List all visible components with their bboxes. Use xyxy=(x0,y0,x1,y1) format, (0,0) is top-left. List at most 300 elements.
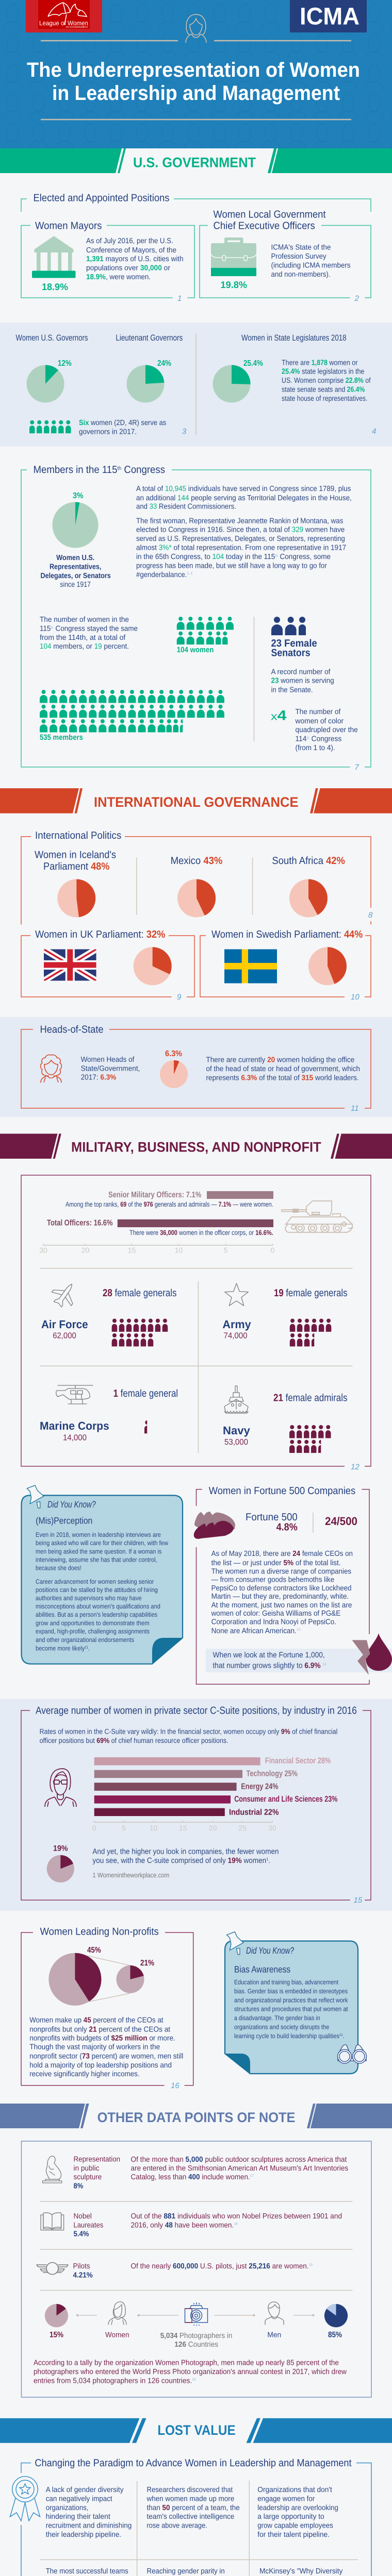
text: 104 members: 115 xyxy=(40,624,52,633)
text: congress history: and 33 Resident Commissioners. xyxy=(136,503,236,511)
text: six governors: Six women (2D, 4R) serve as xyxy=(79,419,166,427)
caption: pie: Representatives, xyxy=(50,563,101,571)
chart: Mexico 43%: Mexico 43% xyxy=(171,855,223,867)
row: public sculpture: sculpture xyxy=(73,2173,102,2181)
heading: heads of state: Heads-of-State xyxy=(40,1024,104,1036)
text: misperception body: Career advancement for women seeking senior xyxy=(36,1578,154,1585)
banner: International Governance: INTERNATIONAL GOVERNANCE xyxy=(94,794,298,810)
callout: did you know bias awareness xyxy=(225,1932,366,2074)
text: mayors: 1,391 mayors of U.S. cities with xyxy=(86,255,184,263)
text: congress history: 5, 6 xyxy=(187,572,192,575)
chart: state legislatures pie xyxy=(213,333,347,403)
chart: Iceland 48%: Parliament 48% xyxy=(43,861,110,872)
heading: 115th Congress: Congress xyxy=(121,464,165,476)
text: bias awareness body xyxy=(234,1979,348,2040)
icon: woman outline xyxy=(186,14,206,43)
text: collective intelligence: rose above average. xyxy=(146,2522,207,2530)
chart: industry bar chart: Industrial 22% xyxy=(229,1808,279,1817)
row: public sculpture: Of the more than 5,000 public outdoor sculptures across America that xyxy=(131,2156,347,2164)
logo: League of Women in Government xyxy=(26,0,102,32)
cell: Air Force: Air Force xyxy=(41,1318,88,1331)
title: The Underrepresentation of Women xyxy=(27,59,360,81)
cell: Navy: Navy xyxy=(223,1424,251,1437)
text: bias awareness body: learning cycle to build leadership qualities xyxy=(234,2032,353,2040)
chart: industry bar chart: 30 xyxy=(268,1824,276,1832)
text: non-profit CEOs: hold a majority of top leadership positions and xyxy=(29,2061,172,2070)
chart: Mexico 43% xyxy=(171,855,223,917)
chart: women governors pie: Women U.S. Governors xyxy=(15,333,88,343)
text: mayors: As of July 2016, per the U.S. xyxy=(86,237,173,245)
text: heads of government: Women Heads of xyxy=(81,1056,135,1064)
text: lack of gender diversity: A lack of gender diversity xyxy=(46,2486,124,2494)
panel: members in the 115th Congress xyxy=(21,464,371,772)
text: bias awareness body: and organizational practices that reflect work xyxy=(234,1997,348,2004)
stat: Fortune 500 share xyxy=(246,1512,357,1533)
text: women of color: quadrupled over the xyxy=(295,726,358,734)
banner: Lost Value xyxy=(0,2418,392,2443)
text: misperception body: misconceptions about women's qualifications and xyxy=(36,1603,160,1610)
chart: industry bar chart: 15 xyxy=(179,1824,187,1832)
logo: ICMA xyxy=(290,0,367,32)
cell: Navy xyxy=(223,1386,348,1453)
caption: pie: Women U.S. xyxy=(56,554,94,562)
text: congress history: Congress, some xyxy=(278,553,331,561)
heading: local government CEOs: Women Local Government xyxy=(214,209,326,221)
text: bias awareness body: a disadvantage. The gender bias in xyxy=(234,2014,320,2022)
text: women of color: women of color xyxy=(295,717,344,725)
text: misperception body: being asked who will care for their children, with few xyxy=(36,1539,169,1547)
icon: broken drop xyxy=(352,1633,392,1675)
text: record senators: in the Senate. xyxy=(271,686,313,694)
chart: state legislatures pie: 25.4% xyxy=(243,359,263,368)
chart: industry bar chart: 5 xyxy=(122,1824,126,1832)
icon: camera xyxy=(185,2302,207,2326)
text: mayors xyxy=(86,237,184,281)
heading: international politics: International Politics xyxy=(35,830,121,841)
text: organizations overlooking women xyxy=(257,2486,338,2539)
text: women of color: The number of xyxy=(295,708,341,716)
cell: Marine Corps: 1 female general xyxy=(113,1388,178,1399)
chart: women in Congress pie xyxy=(53,492,98,548)
row: pilots: Pilots xyxy=(73,2262,90,2270)
heading: did you know: Did You Know? xyxy=(246,1945,294,1956)
panel: governors and state legislatures: 4 xyxy=(372,427,376,436)
panel: other data points xyxy=(22,2141,371,2397)
logo: ICMA: ICMA xyxy=(300,3,360,30)
text: Fortune 500 CEOs: the list — or just under 5% of the total list. xyxy=(211,1559,341,1567)
chart: officers bar chart: 30 xyxy=(39,1246,47,1255)
icon: Swedish flag xyxy=(224,949,277,983)
text: bias awareness body: bias. Gender bias is embedded in stereotypes xyxy=(234,1988,348,1995)
chart: officers bar chart: 20 xyxy=(81,1246,89,1255)
text: misperception body: positions can be stalled by the attitudes of hiring xyxy=(36,1586,158,1594)
chart: women governors pie: 12% xyxy=(58,359,72,368)
text: organizations overlooking women: leadership are overlooking xyxy=(257,2504,338,2512)
banner: U.S. Government xyxy=(0,148,392,173)
panel: heads of state: 11 xyxy=(351,1104,359,1113)
caption: pie: Delegates, or Senators xyxy=(40,572,111,580)
text: gender parity GDP: Reaching gender parity in xyxy=(146,2567,225,2575)
heading: Swedish parliament: Women in Swedish Parliament: 44% xyxy=(211,929,363,940)
text: McKinsey report: McKinsey's "Why Diversity xyxy=(259,2567,343,2575)
panel: heads of state xyxy=(0,1017,392,1117)
row: public sculpture xyxy=(42,2156,348,2191)
chart: Sweden 44% xyxy=(308,947,347,985)
text: ICMA survey: and non-members). xyxy=(271,270,330,279)
text: lack of gender diversity: can negatively impact xyxy=(46,2495,112,2503)
chart: photographers gender split xyxy=(45,2302,348,2349)
panel: C-suite positions by industry xyxy=(0,1699,392,1911)
chart: officers bar chart xyxy=(39,1191,275,1255)
text: women of color: th xyxy=(306,736,309,740)
chart: photographers gender split: 5,034 Photographers in xyxy=(160,2332,232,2340)
text: congress history: almost 3%* of total representation. From one representative in 1917 xyxy=(136,544,346,552)
text: congress history: in the 65th Congress, to 104 today in the 115 xyxy=(136,553,279,561)
pictogram: 21 female admirals xyxy=(289,1425,331,1453)
text: heads of government: 2017: 6.3% xyxy=(81,1074,116,1082)
panel: C-suite positions by industry: 15 xyxy=(354,1896,363,1905)
panel: military xyxy=(21,1175,371,1471)
row: pilots: 19 xyxy=(309,2263,313,2267)
text: 104 members: The number of women in the xyxy=(40,616,129,624)
text: bias awareness body: Education and training bias, advancement xyxy=(234,1979,339,1986)
stat: Fortune 500 share: 4.8% xyxy=(276,1522,298,1533)
stat: Fortune 500 share: 24/500 xyxy=(325,1515,357,1528)
icon: curly-haired woman xyxy=(41,1055,61,1083)
text: world leaders: of the head of state or head of government, which xyxy=(206,1065,360,1073)
icon: UK flag xyxy=(44,949,96,981)
text: world press photo: entries from 5,034 photographers in 126 countries. xyxy=(34,2377,201,2385)
text: lack of gender diversity: recruitment and diminishing xyxy=(46,2522,132,2530)
title: in Leadership and Management xyxy=(52,82,340,105)
text: heads of government: State/Government, xyxy=(81,1064,140,1073)
cell: Air Force: 28 female generals xyxy=(103,1287,176,1299)
text: mayors: populations over 30,000 or xyxy=(86,264,170,273)
chart: women governors pie xyxy=(15,333,88,403)
text: women of color: (from 1 to 4). xyxy=(295,744,335,752)
logo: League of Women in Government: League of Women xyxy=(39,20,88,27)
icon: six women xyxy=(29,420,71,433)
logo: League of Women in Government: IN GOVERNMENT xyxy=(66,26,88,28)
row: Nobel laureates: Laureates xyxy=(73,2222,103,2230)
chart: industry bar chart: Energy 24% xyxy=(241,1782,279,1791)
banner: Military, Business, and Nonprofit xyxy=(0,1133,392,1159)
heading: bias awareness: Bias Awareness xyxy=(234,1964,290,1975)
text: misperception body: men being asked the same question. If a woman is xyxy=(36,1548,161,1555)
text: collective intelligence: team's collective intelligence xyxy=(146,2513,234,2521)
text: six governors: governors in 2017. xyxy=(79,428,137,436)
icon: binoculars xyxy=(337,2045,366,2063)
stat: 19.8%: 19.8% xyxy=(221,279,247,290)
text: ICMA survey: Profession Survey xyxy=(271,252,326,261)
panel: elected and appointed positions: Elected and Appointed Positions xyxy=(33,193,169,204)
chart: industry bar chart: 25 xyxy=(238,1824,247,1832)
text: congress history: an additional 144 people serving as Territorial Delegates in the House, xyxy=(136,494,352,502)
text: collective intelligence: when women made up more xyxy=(146,2495,234,2503)
chart: South Africa 42% xyxy=(272,855,345,917)
text: 104 members: th xyxy=(51,625,54,630)
row: Nobel laureates xyxy=(41,2212,342,2239)
chart: officers bar chart: Total Officers: 16.6% xyxy=(47,1219,112,1228)
chart: women in Congress pie: 3% xyxy=(73,492,83,500)
text: misperception body xyxy=(36,1531,169,1652)
icon: government building xyxy=(32,236,75,278)
text: state legislators: US. Women comprise 22.8% of xyxy=(282,377,371,385)
heading: misperception: (Mis)Perception xyxy=(36,1516,92,1526)
banner: U.S. Government: U.S. GOVERNMENT xyxy=(133,155,256,170)
panel: international politics xyxy=(21,830,373,924)
text: heads of government xyxy=(81,1056,140,1082)
text: women of color xyxy=(295,708,358,752)
text: world leaders: There are currently 20 women holding the office xyxy=(206,1056,354,1064)
icon: bread xyxy=(194,1512,235,1539)
chart: officers bar chart: Among the top ranks, 69 of the 976 generals and admirals — 7.1% — were women. xyxy=(66,1200,273,1208)
cell: Navy: 21 female admirals xyxy=(273,1393,348,1404)
text: mayors: Conference of Mayors, of the xyxy=(86,246,176,255)
chart: lieutenant governors pie: Lieutenant Governors xyxy=(116,333,183,343)
chart: industry bar chart: Consumer and Life Sciences 23% xyxy=(234,1795,337,1804)
text: mayors: 18.9%, were women. xyxy=(86,273,151,281)
text: misperception body: 21 xyxy=(85,1646,88,1650)
chart: officers bar chart: 15 xyxy=(128,1246,136,1255)
banner: Lost Value: LOST VALUE xyxy=(157,2422,236,2438)
text: organizations overlooking women: a large opportunity to xyxy=(257,2513,324,2521)
text: 104 members: 104 members, or 19 percent. xyxy=(40,642,129,651)
text: ICMA survey: (including ICMA members xyxy=(271,262,351,270)
text: ICMA survey xyxy=(271,243,351,279)
text: world press photo: photographers who entered the World Press Photo organization's annual contest in 2017, which drew xyxy=(34,2368,347,2376)
chart: photographers gender split: Men xyxy=(267,2331,281,2339)
chart: industry bar chart: 0 xyxy=(92,1824,96,1832)
row: Nobel laureates: Nobel xyxy=(73,2212,92,2221)
icon: push pin xyxy=(27,1485,44,1508)
pictogram: female senators: Senators xyxy=(271,648,311,659)
text: the fewer women: 1 xyxy=(266,1857,269,1861)
row: pilots: 4.21% xyxy=(73,2271,93,2279)
chart: industry bar chart: Financial Sector 28% xyxy=(265,1757,331,1766)
text: bias awareness body: . xyxy=(343,2032,345,2040)
callout: Fortune 1,000: When we look at the Fortune 1,000, xyxy=(213,1651,325,1659)
chart: lieutenant governors pie: 24% xyxy=(157,359,171,368)
panel: women mayors: 1 xyxy=(177,294,182,303)
panel: changing the paradigm xyxy=(10,2458,381,2576)
text: misperception body: grow and opportunities to demonstrate them xyxy=(36,1619,150,1626)
panel: women mayors xyxy=(21,221,194,303)
text: Fortune 500 CEOs: women of color: Geisha Williams of PG&E xyxy=(211,1609,340,1618)
text: state legislators: 25.4% state legislators in the xyxy=(282,368,364,376)
text: organizations overlooking women: for their talent pipeline. xyxy=(257,2531,330,2539)
panel: military: 12 xyxy=(351,1463,360,1471)
text: misperception body: expand, high-profile, challenging assignments xyxy=(36,1628,150,1635)
text: Fortune 500 CEOs: PepsiCo to defense contractors like Lockheed xyxy=(211,1584,352,1592)
panel: UK parliament xyxy=(21,929,194,1002)
stat: Fortune 500 share: Fortune 500 xyxy=(246,1512,298,1523)
row: Nobel laureates: 5.4% xyxy=(73,2230,89,2239)
chart: non-profit exploded pie xyxy=(48,1946,154,2006)
cell: Army: 74,000 xyxy=(224,1332,248,1341)
stat: 18.9%: 18.9% xyxy=(42,281,68,292)
cell: Navy: 53,000 xyxy=(224,1438,248,1447)
heading: did you know: Did You Know? xyxy=(47,1499,96,1510)
text: ICMA survey: ICMA's State of the xyxy=(271,243,331,251)
chart: C-suite 19% pie: 19% xyxy=(53,1844,68,1853)
cell: Air Force: 62,000 xyxy=(53,1332,76,1341)
text: Fortune 500 CEOs: The women run a diverse range of companies xyxy=(211,1567,351,1575)
text: misperception body: Even in 2018, women in leadership interviews are xyxy=(36,1531,161,1538)
heading: Fortune 500: Women in Fortune 500 Companies xyxy=(209,1485,355,1497)
panel: women local government CEOs xyxy=(200,209,371,303)
heading: UK parliament: Women in UK Parliament: 32% xyxy=(35,929,166,940)
text: six governors xyxy=(79,419,166,436)
icon: briefcase xyxy=(211,238,256,276)
callout: Fortune 1,000 xyxy=(206,1649,392,1672)
panel: governors and state legislatures xyxy=(0,323,392,447)
chart: photographers gender split: Women xyxy=(105,2331,129,2339)
chart: industry bar chart xyxy=(92,1757,337,1832)
panel: members in the 115th Congress: 7 xyxy=(355,763,359,772)
row: pilots xyxy=(37,2262,313,2279)
chart: non-profit exploded pie: 45% xyxy=(87,1946,101,1955)
chart: officers bar chart: 5 xyxy=(224,1246,228,1255)
text: misperception body: . xyxy=(88,1645,90,1652)
panel: Swedish parliament xyxy=(200,929,371,1002)
text: 104 members: Congress stayed the same xyxy=(54,624,138,633)
chart: non-profit exploded pie: 21% xyxy=(140,1959,154,1968)
icon: tank xyxy=(282,1201,352,1232)
text: Fortune 500 CEOs: Corporation and Indra Nooyi of PepsiCo. xyxy=(211,1618,336,1626)
text: women of color: Congress xyxy=(309,735,341,743)
pictogram: 535 members xyxy=(40,690,224,742)
row: Nobel laureates: 2016, only 48 have been women. xyxy=(131,2222,238,2230)
chart: officers bar chart: There were 36,000 women in the officer corps, or 16.6%. xyxy=(129,1229,273,1236)
text: non-profit CEOs: nonprofits but only 21 percent of the CEOs at xyxy=(29,2025,170,2033)
panel: elected and appointed positions xyxy=(21,193,371,212)
text: non-profit CEOs: nonprofits with budgets of $25 million or more. xyxy=(29,2034,175,2042)
icon: push pin xyxy=(227,1932,243,1955)
banner: Military, Business, and Nonprofit: MILITARY, BUSINESS, AND NONPROFIT xyxy=(71,1140,321,1155)
chart: lieutenant governors pie xyxy=(116,333,183,403)
pictogram: 104 women xyxy=(177,617,234,654)
text: congress history: served as U.S. Representatives, Delegates, or Senators, representing xyxy=(136,535,345,543)
text: state legislators: state house of representatives. xyxy=(282,395,367,403)
text: record senators: 23 women is serving xyxy=(271,677,334,685)
text: the fewer women: you see, with the C-suite comprised of only 19% women xyxy=(92,1856,269,1865)
cell: Marine Corps: 14,000 xyxy=(63,1433,87,1442)
text: Fortune 500 CEOs: As of May 2018, there are 24 female CEOs on xyxy=(211,1550,353,1558)
caption: pie: since 1917 xyxy=(60,581,91,589)
text: most successful teams: The most successful teams xyxy=(46,2567,128,2575)
cell: Army: Army xyxy=(222,1318,251,1331)
heading: women mayors: Women Mayors xyxy=(35,221,102,232)
cell: Air Force xyxy=(41,1277,176,1346)
text: organizations overlooking women: Organizations that don't xyxy=(257,2486,332,2494)
text: Fortune 500 CEOs: 13 xyxy=(297,1628,300,1632)
banner: Other Data Points of Note: OTHER DATA POINTS OF NOTE xyxy=(97,2110,295,2125)
icon: woman photographer xyxy=(108,2302,126,2325)
chart: South Africa 42%: South Africa 42% xyxy=(272,855,345,867)
panel: women in Fortune 500 companies xyxy=(194,1485,392,1684)
text: record senators: A record number of xyxy=(271,668,331,676)
chart: photographers gender split: 126 Countries xyxy=(174,2341,218,2349)
heading: local government CEOs: Chief Executive Officers xyxy=(214,221,315,232)
chart: photographers gender split: 15% xyxy=(50,2331,63,2339)
row: public sculpture: 8% xyxy=(73,2182,83,2191)
panel: governors and state legislatures: 3 xyxy=(182,427,187,436)
text: misperception body: become more likely xyxy=(36,1645,91,1652)
text: congress history: The first woman, Representative Jeannette Rankin of Montana, was xyxy=(136,517,343,526)
stat: times four: x4 xyxy=(271,707,287,723)
text: rates vary: officer positions but 69% of chief human resource officer positions. xyxy=(40,1736,228,1744)
chart: state legislatures pie: Women in State Legislatures 2018 xyxy=(241,333,347,343)
icon: award ribbon xyxy=(10,2477,40,2521)
text: non-profit CEOs: Though the vast majority of workers in the xyxy=(29,2043,160,2052)
chart: Iceland 48%: Women in Iceland's xyxy=(35,850,116,861)
text: organizations overlooking women: engage women for xyxy=(257,2495,315,2503)
cell: Marine Corps: Marine Corps xyxy=(40,1419,109,1432)
banner: International Governance xyxy=(0,788,392,814)
text: state legislators: There are 1,878 women or xyxy=(282,359,358,367)
text: state legislators xyxy=(282,359,371,403)
text: world press photo: According to a tally by the organization Women Photograph, men made up nearly 85 percent of the xyxy=(34,2359,339,2367)
pictogram: 28 female generals xyxy=(112,1319,168,1346)
text: the fewer women: . xyxy=(268,1856,270,1865)
text: congress history: A total of 10,945 individuals have served in Congress since 1789, plus xyxy=(136,485,351,493)
heading: local government CEOs xyxy=(214,209,326,232)
pictogram: 535 members: 535 members xyxy=(40,733,83,742)
callout: did you know misperception xyxy=(22,1485,183,1664)
text: Fortune 500 CEOs xyxy=(211,1550,353,1635)
heading: non-profits: Women Leading Non-profits xyxy=(40,1926,159,1938)
cell: Army xyxy=(222,1283,348,1346)
text: congress history: elected to Congress in 1916. Since then, a total of 329 women have xyxy=(136,526,345,534)
panel: international politics: 8 xyxy=(368,911,373,920)
heading: changing the paradigm: Changing the Paradigm to Advance Women in Leadership and Management xyxy=(35,2458,352,2469)
text: congress history xyxy=(136,485,352,579)
text: congress history: #genderbalance. xyxy=(136,571,192,579)
row: public sculpture: Catalog, less than 400 include women. xyxy=(131,2173,254,2181)
text: the fewer women: And yet, the higher you look in companies, the fewer women xyxy=(92,1848,279,1856)
text: world press photo xyxy=(34,2359,347,2385)
heading: 115th Congress: Members in the 115 xyxy=(33,464,124,476)
row: Nobel laureates: Out of the 881 individuals who won Nobel Prizes between 1901 and xyxy=(131,2212,342,2221)
text: non-profit CEOs: receive significantly higher incomes. xyxy=(29,2070,140,2078)
text: bias awareness body: 21 xyxy=(339,2033,343,2037)
row: public sculpture: Representation xyxy=(73,2156,120,2164)
pictogram: 104 women: 104 women xyxy=(177,646,214,654)
text: collective intelligence xyxy=(146,2486,240,2530)
text: bias awareness body: structures and procedures that put women at xyxy=(234,2006,348,2013)
text: world leaders: represents 6.3% of the total of 315 world leaders. xyxy=(206,1074,359,1082)
panel: Swedish parliament: 10 xyxy=(351,993,360,1002)
text: Fortune 500 CEOs: At the moment, just two names on the list are xyxy=(211,1601,352,1609)
pictogram: female senators: 23 Female xyxy=(271,638,317,649)
callout: Fortune 1,000: 14 xyxy=(322,1663,326,1666)
chart: industry bar chart: Technology 25% xyxy=(247,1770,298,1778)
text: collective intelligence: than 50 percent of a team, the xyxy=(146,2504,240,2512)
chart: industry bar chart: 20 xyxy=(209,1824,217,1832)
text: Fortune 500 CEOs: — from consumer goods behemoths like xyxy=(211,1575,334,1584)
chart: industry bar chart: 10 xyxy=(150,1824,158,1832)
title xyxy=(27,59,360,105)
text: women of color: 114 xyxy=(295,735,307,743)
chart: Iceland 48% xyxy=(35,850,116,917)
text: rates vary xyxy=(40,1727,337,1744)
panel: women leading non-profits xyxy=(21,1926,193,2090)
row: Nobel laureates: 18 xyxy=(234,2223,238,2226)
text: lack of gender diversity: their leadership pipeline. xyxy=(46,2531,121,2539)
cell: Army: 19 female generals xyxy=(274,1287,348,1299)
text: misperception body: authorities and supervisors who may have xyxy=(36,1595,142,1602)
